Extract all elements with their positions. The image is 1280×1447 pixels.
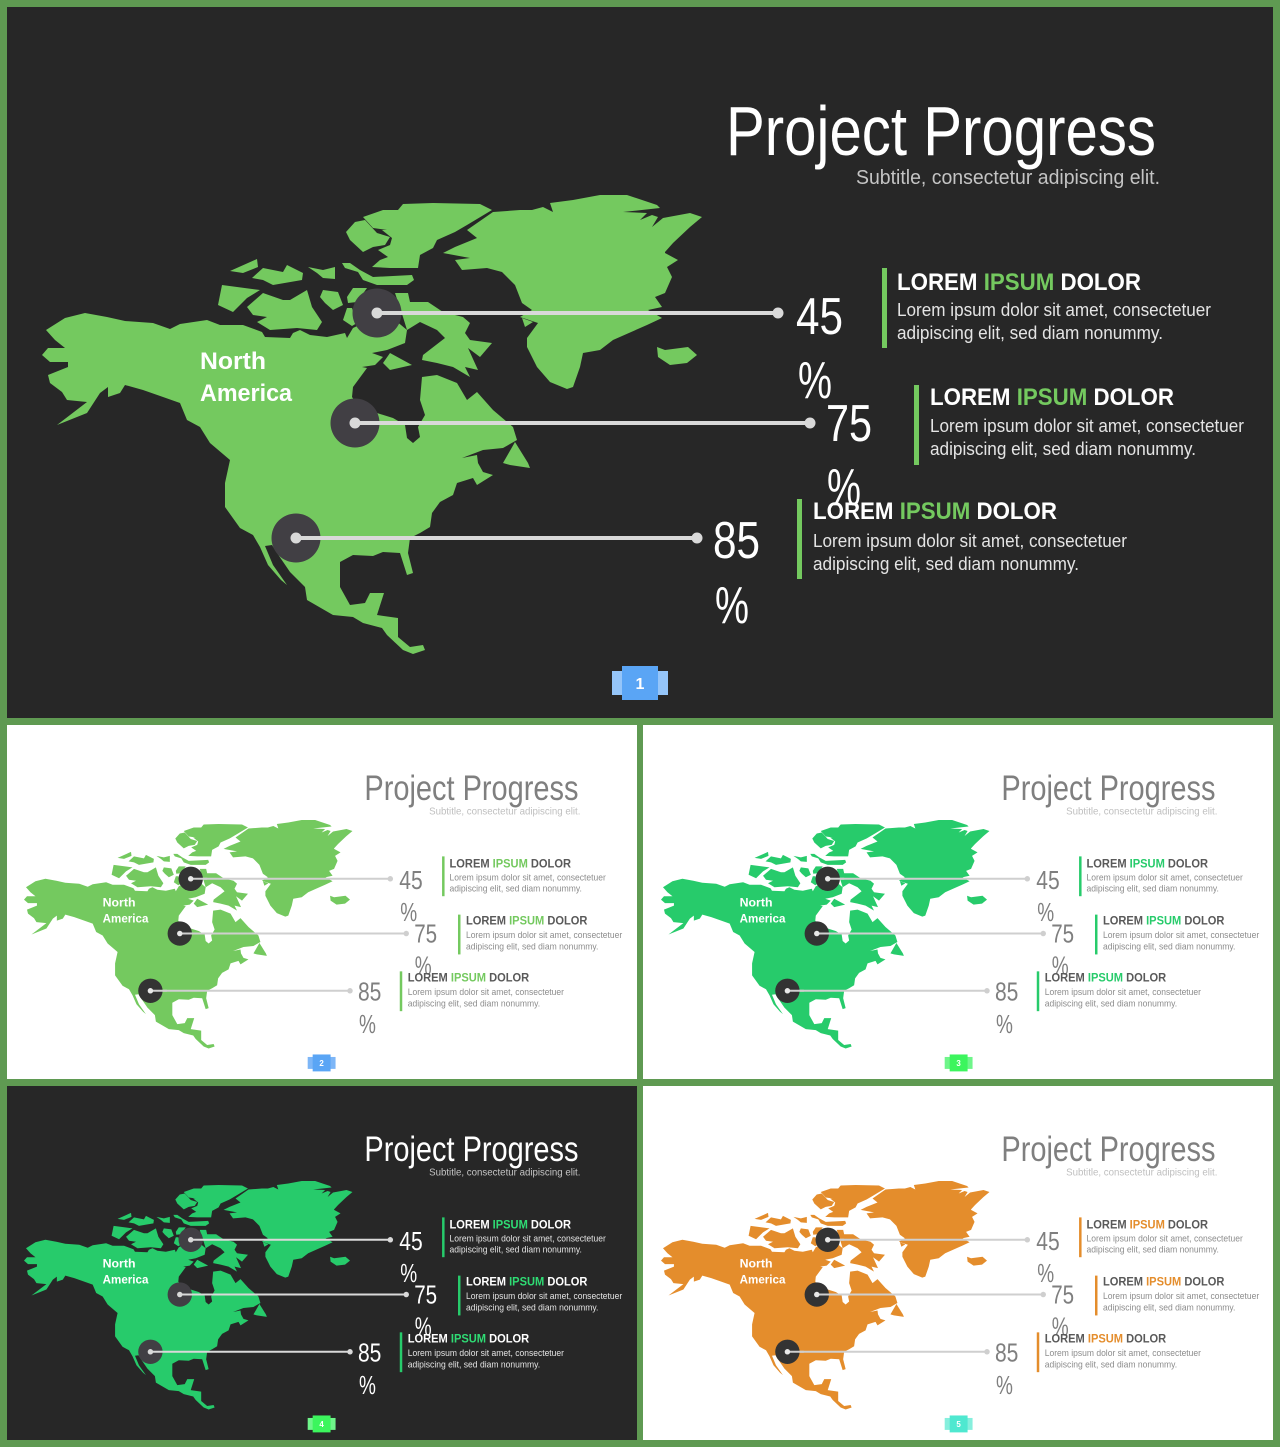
text block 2: LOREM IPSUM DOLOR — [930, 384, 1174, 411]
value 45%: 45 — [796, 288, 843, 346]
slide 3 map label: America — [740, 912, 786, 926]
map label: North — [200, 348, 266, 375]
text block 2: adipiscing elit, sed diam nonummy. — [930, 439, 1196, 459]
text block 1: Lorem ipsum dolor sit amet, consectetuer — [897, 300, 1211, 320]
slide 2 badge: 2 — [319, 1059, 324, 1068]
slide 3 badge — [945, 1054, 973, 1071]
slide 3 values: % — [996, 1011, 1013, 1039]
slide 3 subtitle: Subtitle, consectetur adipiscing elit. — [1066, 807, 1217, 818]
slide 4 markers — [138, 1228, 409, 1364]
map label: America — [200, 380, 293, 407]
slide 5 text blocks: Lorem ipsum dolor sit amet, consectetuer — [1045, 1348, 1201, 1358]
marker 2 — [330, 398, 816, 448]
text block 1: adipiscing elit, sed diam nonummy. — [897, 323, 1163, 343]
slide 5 map label: America — [740, 1273, 786, 1287]
slide 3 markers — [775, 867, 1046, 1003]
slide 5 markers — [775, 1228, 1046, 1364]
map: North America — [42, 195, 702, 654]
slide 4 text blocks: adipiscing elit, sed diam nonummy. — [466, 1302, 598, 1312]
text block 2 — [914, 384, 1244, 465]
panel: slide 5 orange on white — [643, 1086, 1273, 1440]
slide 3 text blocks: adipiscing elit, sed diam nonummy. — [1045, 999, 1177, 1009]
slide 5 text blocks — [1037, 1217, 1259, 1372]
slide 3 map — [661, 820, 989, 1048]
main background — [7, 7, 1273, 718]
slide 2 content — [24, 769, 622, 1071]
slide 4 values: 75 — [414, 1281, 437, 1309]
text block 2: Lorem ipsum dolor sit amet, consectetuer — [930, 416, 1244, 436]
text block 1 — [882, 268, 1211, 348]
slide 4 text blocks: Lorem ipsum dolor sit amet, consectetuer — [466, 1291, 622, 1301]
slide 4 background — [7, 1086, 637, 1440]
slide 4 values: % — [415, 1313, 432, 1341]
slide 2 badge — [308, 1054, 336, 1071]
slide 5 subtitle: Subtitle, consectetur adipiscing elit. — [1066, 1168, 1217, 1179]
slide 2 values: % — [359, 1011, 376, 1039]
marker 3 — [272, 514, 702, 562]
marker 1 — [352, 288, 784, 338]
slide 3 text blocks: adipiscing elit, sed diam nonummy. — [1103, 941, 1235, 951]
title: Project Progress — [726, 92, 1156, 170]
slide 5 text blocks: adipiscing elit, sed diam nonummy. — [1045, 1360, 1177, 1370]
slide 2 text blocks: Lorem ipsum dolor sit amet, consectetuer — [466, 930, 622, 940]
slide 3 title: Project Progress — [1001, 769, 1215, 808]
slide 2 background — [7, 725, 637, 1079]
slide 3 text blocks: adipiscing elit, sed diam nonummy. — [1087, 884, 1219, 894]
slide 2 subtitle: Subtitle, consectetur adipiscing elit. — [429, 807, 580, 818]
slide 2 values: % — [400, 899, 417, 927]
slide 2 text blocks: LOREM IPSUM DOLOR — [450, 856, 571, 870]
slide 2 values: 45 — [399, 867, 423, 895]
panel: slide 2 light green — [7, 725, 637, 1079]
slide 3 values: 75 — [1051, 920, 1074, 948]
slide 3 map label: North — [740, 896, 772, 910]
panel: main slide — [7, 7, 1273, 718]
value 45%: % — [798, 352, 832, 410]
slide 2 text blocks: adipiscing elit, sed diam nonummy. — [408, 999, 540, 1009]
slide 3 values: 85 — [995, 979, 1018, 1007]
slide 5 text blocks: adipiscing elit, sed diam nonummy. — [1103, 1302, 1235, 1312]
slide 4 text blocks: LOREM IPSUM DOLOR — [408, 1331, 530, 1345]
slide 4 text blocks: adipiscing elit, sed diam nonummy. — [408, 1360, 540, 1370]
slide 2 text blocks: Lorem ipsum dolor sit amet, consectetuer — [408, 987, 564, 997]
slide 3 values: 45 — [1036, 867, 1060, 895]
slide 2 map label: America — [103, 912, 149, 926]
slide 4 text blocks: Lorem ipsum dolor sit amet, consectetuer — [450, 1233, 606, 1243]
slide 5 values: 75 — [1051, 1281, 1074, 1309]
slide 4 text blocks: LOREM IPSUM DOLOR — [466, 1275, 588, 1289]
slide 5 map label: North — [740, 1257, 772, 1271]
slide 3 text blocks: Lorem ipsum dolor sit amet, consectetuer — [1103, 930, 1259, 940]
slide 5 values: % — [996, 1372, 1013, 1400]
slide 5 badge: 5 — [956, 1420, 961, 1429]
value 75%: % — [827, 459, 861, 517]
slide 2 values: 75 — [414, 920, 437, 948]
text block 3: LOREM IPSUM DOLOR — [813, 498, 1057, 525]
slide 5 content — [661, 1130, 1259, 1432]
slide 3 values: % — [1052, 952, 1069, 980]
slide 2 text blocks: LOREM IPSUM DOLOR — [466, 914, 588, 928]
slide 2 map label: North — [103, 896, 135, 910]
slide 2 values: 85 — [358, 979, 381, 1007]
slide 3 text blocks: LOREM IPSUM DOLOR — [1045, 970, 1167, 984]
slide 4 text blocks: adipiscing elit, sed diam nonummy. — [450, 1245, 582, 1255]
slide 4 text blocks: LOREM IPSUM DOLOR — [450, 1217, 571, 1231]
slide 3 text blocks: LOREM IPSUM DOLOR — [1103, 914, 1225, 928]
text block 3: adipiscing elit, sed diam nonummy. — [813, 554, 1079, 574]
slide 4 subtitle: Subtitle, consectetur adipiscing elit. — [429, 1168, 580, 1179]
slide 4 values: 85 — [358, 1340, 381, 1368]
slide 3 values: % — [1037, 899, 1054, 927]
slide 3 text blocks — [1037, 856, 1259, 1011]
slide 5 text blocks: LOREM IPSUM DOLOR — [1045, 1331, 1167, 1345]
text block 3 — [797, 498, 1127, 579]
slide 5 values: % — [1052, 1313, 1069, 1341]
text block 1: LOREM IPSUM DOLOR — [897, 269, 1141, 296]
page badge 1: 1 — [636, 676, 645, 693]
slide 4 map label: America — [103, 1273, 149, 1287]
slide 5 text blocks: LOREM IPSUM DOLOR — [1103, 1275, 1225, 1289]
slide 4 values: % — [359, 1372, 376, 1400]
slide 5 text blocks: Lorem ipsum dolor sit amet, consectetuer — [1103, 1291, 1259, 1301]
slide 3 background — [643, 725, 1273, 1079]
slide 5 values: 85 — [995, 1340, 1018, 1368]
slide 3 badge: 3 — [956, 1059, 961, 1068]
value 85%: % — [715, 577, 749, 635]
slide 5 text blocks: Lorem ipsum dolor sit amet, consectetuer — [1087, 1233, 1243, 1243]
slide 2 text blocks — [400, 856, 622, 1011]
panel: slide 3 emerald on white — [643, 725, 1273, 1079]
slide 4 text blocks: Lorem ipsum dolor sit amet, consectetuer — [408, 1348, 564, 1358]
slide 2 text blocks: adipiscing elit, sed diam nonummy. — [450, 884, 582, 894]
page badge 1 — [612, 666, 668, 700]
slide 2 text blocks: adipiscing elit, sed diam nonummy. — [466, 941, 598, 951]
slide 2 title: Project Progress — [364, 769, 578, 808]
slide 3 text blocks: Lorem ipsum dolor sit amet, consectetuer — [1045, 987, 1201, 997]
value 85%: 85 — [713, 512, 760, 570]
slide 5 text blocks: LOREM IPSUM DOLOR — [1087, 1217, 1208, 1231]
slide 2 text blocks: LOREM IPSUM DOLOR — [408, 970, 530, 984]
text block 3: Lorem ipsum dolor sit amet, consectetuer — [813, 531, 1127, 551]
slide 5 title: Project Progress — [1001, 1130, 1215, 1169]
slide 5 text blocks: adipiscing elit, sed diam nonummy. — [1087, 1245, 1219, 1255]
subtitle: Subtitle, consectetur adipiscing elit. — [856, 167, 1160, 189]
slide 4 title: Project Progress — [364, 1130, 578, 1169]
slide 2 map — [24, 820, 352, 1048]
slide 5 badge — [945, 1415, 973, 1432]
slide 3 text blocks: LOREM IPSUM DOLOR — [1087, 856, 1208, 870]
slide 4 map — [24, 1181, 352, 1409]
slide 2 markers — [138, 867, 409, 1003]
slide 4 values: % — [400, 1260, 417, 1288]
slide 4 map label: North — [103, 1257, 135, 1271]
panel: slide 4 emerald on dark — [7, 1086, 637, 1440]
value 75%: 75 — [826, 395, 872, 453]
slide 5 values: 45 — [1036, 1228, 1060, 1256]
slide 4 text blocks — [400, 1217, 622, 1372]
slide 5 values: % — [1037, 1260, 1054, 1288]
slide 4 values: 45 — [399, 1228, 423, 1256]
slide 5 map — [661, 1181, 989, 1409]
slide 4 badge: 4 — [319, 1420, 324, 1429]
slide 4 badge — [308, 1415, 336, 1432]
slide 4 content — [24, 1130, 622, 1432]
slide 3 content — [661, 769, 1259, 1071]
slide 5 background — [643, 1086, 1273, 1440]
slide 2 text blocks: Lorem ipsum dolor sit amet, consectetuer — [450, 872, 606, 882]
slide 3 text blocks: Lorem ipsum dolor sit amet, consectetuer — [1087, 872, 1243, 882]
slide 2 values: % — [415, 952, 432, 980]
